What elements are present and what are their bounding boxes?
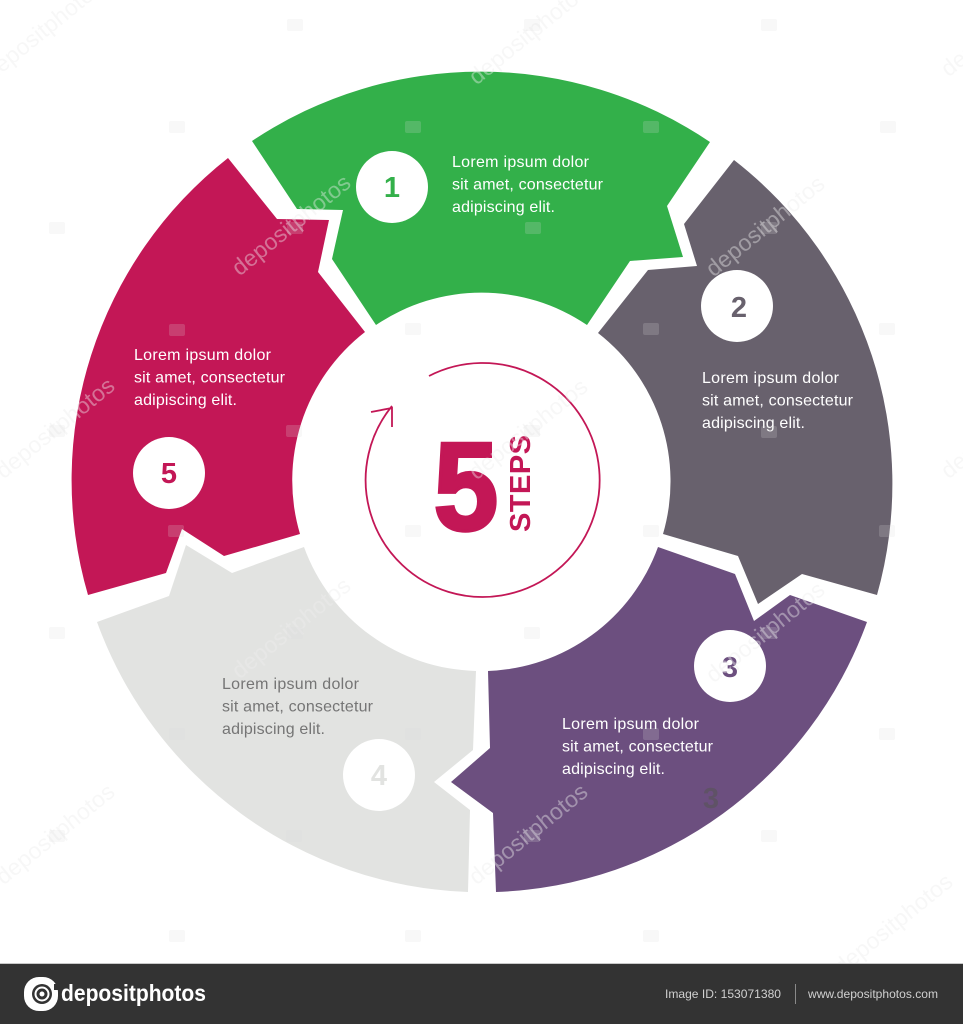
text block 4: sit amet, consectetur bbox=[222, 698, 374, 716]
text block 2: Lorem ipsum dolor bbox=[702, 370, 840, 387]
text block 2 bbox=[702, 370, 854, 432]
watermark overlay: depositphotos bbox=[828, 868, 957, 980]
center: STEPS label: STEPS bbox=[505, 435, 537, 532]
segment 5: magenta bbox=[72, 158, 365, 595]
text block 1: sit amet, consectetur bbox=[452, 176, 604, 194]
icon: camera logo bbox=[24, 977, 59, 1011]
ghost numeral 3: 3 bbox=[703, 783, 719, 815]
number badge 1 bbox=[356, 151, 428, 223]
watermark overlay: depositphotos bbox=[226, 572, 355, 684]
text block 4: adipiscing elit. bbox=[222, 721, 325, 738]
text block 5 bbox=[134, 347, 286, 409]
text block 5: Lorem ipsum dolor bbox=[134, 347, 272, 364]
text block 1: adipiscing elit. bbox=[452, 199, 555, 216]
number badge 4: 4 bbox=[371, 760, 387, 792]
watermark overlay: depositphotos bbox=[463, 373, 592, 485]
number badge 5: 5 bbox=[161, 458, 177, 490]
number badge 5 bbox=[133, 437, 205, 509]
text block 2: sit amet, consectetur bbox=[702, 392, 854, 410]
center: circular arrow bbox=[366, 363, 600, 597]
segment 1: green bbox=[252, 72, 710, 325]
number badge 2: 2 bbox=[731, 292, 747, 324]
text block 5: sit amet, consectetur bbox=[134, 370, 286, 386]
watermark overlay: depositphotos bbox=[700, 576, 829, 688]
website url: www.depositphotos.com bbox=[807, 987, 938, 1001]
watermark overlay: depositphotos bbox=[700, 170, 829, 282]
text block 5: adipiscing elit. bbox=[134, 392, 237, 409]
text block 3: adipiscing elit. bbox=[562, 761, 665, 778]
text block 3: Lorem ipsum dolor bbox=[562, 716, 700, 733]
text block 2: adipiscing elit. bbox=[702, 415, 805, 432]
number badge 3: 3 bbox=[722, 652, 738, 684]
footer logo wordmark: depositphotos bbox=[61, 980, 206, 1006]
text block 4 bbox=[222, 676, 374, 738]
text block 3 bbox=[562, 716, 714, 778]
watermark overlay: depositphotos bbox=[226, 169, 355, 281]
watermark overlay: depositphotos bbox=[463, 778, 592, 890]
text block 4: Lorem ipsum dolor bbox=[222, 676, 360, 693]
image id: Image ID: 153071380 bbox=[665, 987, 781, 1001]
text block 1: Lorem ipsum dolor bbox=[452, 154, 590, 171]
text block 3: sit amet, consectetur bbox=[562, 738, 714, 756]
center: big number 5: 5 bbox=[434, 417, 498, 557]
number badge 1: 1 bbox=[384, 172, 400, 204]
segment 3: purple bbox=[451, 547, 867, 892]
number badge 2 bbox=[701, 270, 773, 342]
text block 1 bbox=[452, 154, 604, 216]
segment 2: slate grey bbox=[598, 160, 892, 604]
number badge 4 bbox=[343, 739, 415, 811]
footer bar bbox=[0, 963, 963, 1024]
segment 4: light grey bbox=[97, 545, 476, 892]
number badge 3 bbox=[694, 630, 766, 702]
